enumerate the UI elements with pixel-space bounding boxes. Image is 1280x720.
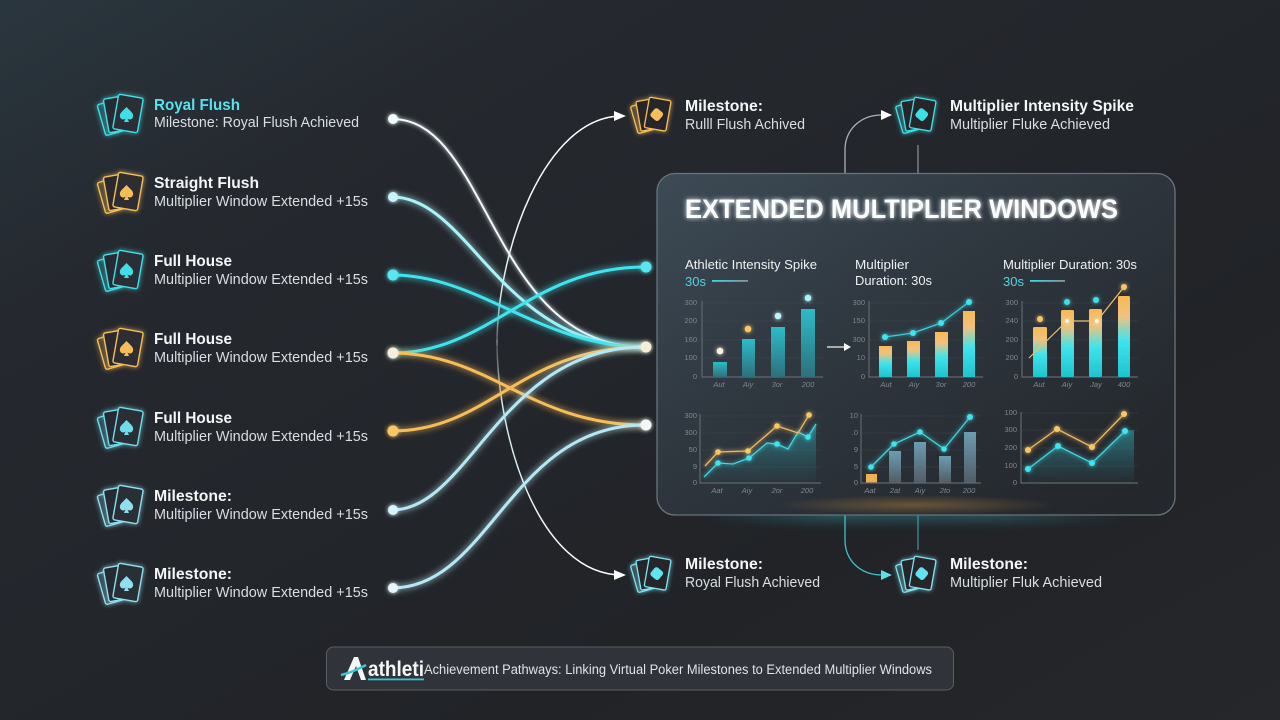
left column: milestones bbox=[97, 94, 368, 605]
panel warm glow bbox=[775, 495, 1055, 515]
label: Milestone: bbox=[685, 98, 763, 115]
arrow: panel to intensity spike bbox=[845, 110, 892, 173]
arrowheads on thin connectors bbox=[614, 111, 626, 580]
label: milestone bbox=[154, 488, 368, 523]
chart 3: bars and line: 200 bbox=[1005, 353, 1018, 362]
chart heading 3 bbox=[1003, 258, 1137, 289]
chart 4: dual line area: Aiy bbox=[741, 486, 753, 495]
chart 5: bars and line: .0 bbox=[852, 428, 858, 437]
connector: royal flush bbox=[392, 119, 645, 347]
chart 6: dual line area: 0 bbox=[1013, 478, 1017, 487]
chart 5: bars and line: 9 bbox=[854, 445, 858, 454]
label: royal flush bbox=[154, 97, 359, 131]
chart 2: bars and line: 300 bbox=[852, 335, 865, 344]
chart 1: bars: 100 bbox=[684, 353, 697, 362]
chart 3: bars and line: 0 bbox=[1014, 372, 1018, 381]
label: Multiplier Fluk Achieved bbox=[950, 575, 1102, 591]
label: full house bbox=[154, 410, 368, 445]
chart 4: dual line area: 2or bbox=[771, 486, 783, 495]
logo bbox=[341, 657, 424, 681]
connector: thin milestone down bbox=[497, 340, 622, 575]
milestone: top right bbox=[895, 97, 1134, 134]
icon: cards cyan diamond bbox=[895, 556, 936, 593]
chart 1: bars bbox=[684, 295, 823, 389]
chart 2: bars and line: 10 bbox=[857, 353, 865, 362]
panel: extended multiplier windows bbox=[657, 174, 1175, 515]
chart 3: bars and line: 300 bbox=[1005, 298, 1018, 307]
connector: straight flush bbox=[392, 197, 645, 347]
chart 4: dual line area: 50 bbox=[689, 445, 697, 454]
chart 1: bars: 0 bbox=[693, 372, 697, 381]
chart 1: bars: Aiy bbox=[742, 380, 754, 389]
chart 6: dual line area: 300 bbox=[1004, 425, 1017, 434]
line: panel to lower milestone icon bbox=[917, 515, 919, 550]
chart 1: bars: 200 bbox=[684, 316, 697, 325]
label: milestone: Milestone: bbox=[154, 488, 232, 505]
label: full house: Full House bbox=[154, 331, 232, 348]
label bbox=[950, 98, 1134, 133]
arrow between charts bbox=[827, 343, 851, 351]
label: full house: Full House bbox=[154, 253, 232, 270]
chart 5: bars and line: 2at bbox=[889, 486, 901, 495]
connector: milestone 6 bbox=[392, 347, 645, 510]
label: Multiplier Intensity Spike bbox=[950, 98, 1134, 115]
chart 1: bars: 300 bbox=[684, 298, 697, 307]
chart heading 1: 30s bbox=[685, 275, 706, 289]
icon: cards light blue spade bbox=[97, 407, 143, 449]
connector: full house 2 orange bbox=[392, 353, 645, 425]
chart 3: bars and line: 200 bbox=[1005, 335, 1018, 344]
chart 1: bars: Aut bbox=[712, 380, 726, 389]
icon: cards cyan spade bbox=[97, 250, 143, 292]
chart 2: bars and line: 0 bbox=[861, 372, 865, 381]
milestone: top center bbox=[630, 97, 805, 134]
icon: cards orange diamond bbox=[630, 97, 671, 134]
label: straight flush bbox=[154, 175, 368, 210]
chart 3: bars and line: 240 bbox=[1005, 316, 1018, 325]
milestone: bottom center bbox=[630, 556, 820, 593]
icon: cards light blue spade bbox=[97, 563, 143, 605]
chart 6: dual line area bbox=[1004, 408, 1138, 487]
panel heading: EXTENDED MULTIPLIER WINDOWS bbox=[685, 194, 1118, 224]
pathway connectors bbox=[392, 116, 645, 588]
label: straight flush: Straight Flush bbox=[154, 175, 259, 192]
label: milestone bbox=[154, 566, 368, 601]
label bbox=[685, 556, 820, 591]
chart 1: bars: 160 bbox=[684, 335, 697, 344]
icon: cards cyan diamond bbox=[630, 556, 671, 593]
label: full house bbox=[154, 331, 368, 366]
chart 3: bars and line: Aiy bbox=[1061, 380, 1073, 389]
chart heading 3: Multiplier Duration: 30s bbox=[1003, 258, 1137, 272]
label: Milestone: bbox=[685, 556, 763, 573]
icon: cards orange spade bbox=[97, 328, 143, 370]
connector: full house 3 bbox=[392, 347, 645, 431]
chart 5: bars and line: 200 bbox=[962, 486, 976, 495]
line: panel to intensity spike icon bbox=[917, 145, 919, 173]
logo: athleti bbox=[368, 658, 424, 681]
chart 4: dual line area: 200 bbox=[800, 486, 814, 495]
chart 3: bars and line bbox=[1005, 284, 1138, 389]
chart heading 1: Athletic Intensity Spike bbox=[685, 258, 817, 272]
icon: cards cyan diamond bbox=[895, 97, 936, 134]
chart 2: bars and line: Aut bbox=[879, 380, 893, 389]
chart 2: bars and line: Aiy bbox=[908, 380, 920, 389]
chart 2: bars and line: 200 bbox=[962, 380, 976, 389]
label bbox=[685, 98, 805, 133]
chart 4: dual line area: 300 bbox=[684, 428, 697, 437]
connector: full house 2 cyan bbox=[392, 267, 645, 353]
chart 5: bars and line: 2to bbox=[939, 486, 950, 495]
chart heading 3: 30s bbox=[1003, 275, 1024, 289]
chart heading 2 bbox=[855, 258, 932, 288]
chart 4: dual line area: 9 bbox=[693, 462, 697, 471]
connector: milestone 7 bbox=[392, 425, 645, 588]
arrow: panel to lower milestone bbox=[845, 515, 892, 580]
chart 5: bars and line bbox=[850, 411, 981, 495]
label: full house: Multiplier Window Extended +15s bbox=[154, 429, 368, 445]
label: Rulll Flush Achived bbox=[685, 117, 805, 133]
label bbox=[950, 556, 1102, 591]
panel glow under bbox=[700, 508, 1130, 520]
chart 5: bars and line: 10 bbox=[850, 411, 858, 420]
chart 5: bars and line: 5 bbox=[854, 462, 858, 471]
node dots bbox=[388, 114, 652, 593]
label: full house: Multiplier Window Extended +15s bbox=[154, 350, 368, 366]
footer caption: Achievement Pathways: Linking Virtual Poker Milestones to Extended Multiplier Windows bbox=[424, 662, 932, 677]
chart heading 2: Multiplier bbox=[855, 258, 909, 272]
chart 3: bars and line: Aut bbox=[1032, 380, 1046, 389]
label: milestone: Multiplier Window Extended +15s bbox=[154, 585, 368, 601]
chart 2: bars and line: 300 bbox=[852, 298, 865, 307]
chart heading 2: Duration: 30s bbox=[855, 274, 932, 288]
icon: cards light blue spade bbox=[97, 485, 143, 527]
chart 2: bars and line bbox=[852, 298, 983, 389]
chart heading 1 bbox=[685, 258, 817, 289]
label: full house: Full House bbox=[154, 410, 232, 427]
label: Multiplier Fluke Achieved bbox=[950, 117, 1110, 133]
chart 4: dual line area: 300 bbox=[684, 411, 697, 420]
icon: cards orange spade bbox=[97, 172, 143, 214]
label: royal flush: Milestone: Royal Flush Achieved bbox=[154, 115, 359, 131]
chart 5: bars and line: 0 bbox=[854, 478, 858, 487]
chart 4: dual line area: 0 bbox=[693, 478, 697, 487]
chart 2: bars and line: 150 bbox=[852, 316, 865, 325]
milestone: bottom right bbox=[895, 556, 1102, 593]
label: full house bbox=[154, 253, 368, 288]
chart 5: bars and line: Aiy bbox=[914, 486, 926, 495]
label: Royal Flush Achieved bbox=[685, 575, 820, 591]
label: Milestone: bbox=[950, 556, 1028, 573]
footer bar bbox=[326, 647, 954, 690]
connector: thin milestone up bbox=[497, 116, 622, 345]
chart 6: dual line area: 200 bbox=[1004, 443, 1017, 452]
connector: full house 1 bbox=[392, 275, 645, 347]
chart 4: dual line area bbox=[684, 411, 821, 495]
chart 5: bars and line: Aat bbox=[863, 486, 877, 495]
label: milestone: Multiplier Window Extended +15s bbox=[154, 507, 368, 523]
chart 3: bars and line: 400 bbox=[1118, 380, 1131, 389]
chart 1: bars: 200 bbox=[801, 380, 815, 389]
label: royal flush: Royal Flush bbox=[154, 97, 240, 114]
chart 3: bars and line: Jay bbox=[1089, 380, 1103, 389]
label: milestone: Milestone: bbox=[154, 566, 232, 583]
label: straight flush: Multiplier Window Extended +15s bbox=[154, 194, 368, 210]
chart 2: bars and line: 3or bbox=[936, 380, 947, 389]
label: full house: Multiplier Window Extended +15s bbox=[154, 272, 368, 288]
icon: cards cyan spade bbox=[97, 94, 143, 136]
chart 6: dual line area: 100 bbox=[1004, 408, 1017, 417]
chart 1: bars: 3or bbox=[772, 380, 783, 389]
chart 6: dual line area: 100 bbox=[1004, 461, 1017, 470]
chart 4: dual line area: Aat bbox=[710, 486, 724, 495]
